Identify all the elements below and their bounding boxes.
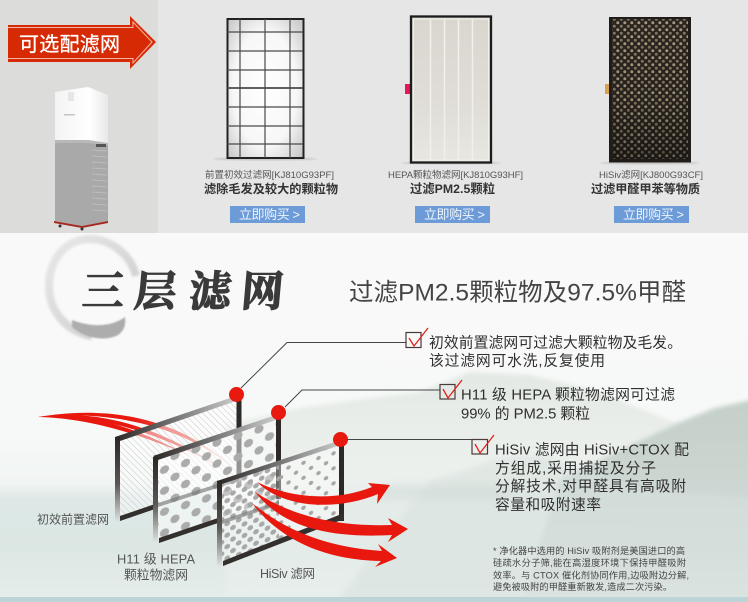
arrow: outgoing airflow middle	[255, 492, 408, 542]
text: HEPA caption: HEPA颗粒物滤网[KJ810G93HF]	[388, 169, 523, 181]
panel: HiSiv layer	[217, 439, 344, 566]
text: footnote: 避免被吸附的甲醛重新散发,造成二次污染。	[493, 581, 672, 592]
button: buy HiSiv filter: 立即购买 >	[623, 207, 684, 222]
text: pre-filter feature: 滤除毛发及较大的颗粒物	[204, 181, 338, 196]
text: pre-filter caption: 前置初效过滤网[KJ810G93PF]	[205, 169, 334, 181]
text: footnote: 效率。与 CTOX 催化剂协同作用,边吸附边分解,	[493, 570, 689, 580]
icon: marker dot HEPA	[271, 405, 286, 420]
text: footnote: * 净化器中选用的 HiSiv 吸附剂是美国进口的高	[493, 545, 685, 556]
text: footnote: 硅疏水分子筛,能在高湿度环境下保持甲醛吸附	[493, 557, 686, 568]
text: pre-filter description: 该过滤网可水洗,反复使用	[429, 352, 605, 370]
text: HEPA description: H11 级 HEPA 颗粒物滤网可过滤	[461, 386, 675, 404]
icon: marker dot HiSiv	[333, 432, 348, 447]
heading: filtration subtitle: 过滤PM2.5颗粒物及97.5%甲醛	[349, 278, 686, 306]
text: HiSiv description: 容量和吸附速率	[495, 496, 601, 514]
arrow: incoming airflow	[38, 413, 236, 471]
leader line: pre-filter	[241, 342, 406, 388]
icon: ink circle	[49, 239, 136, 338]
text: HiSiv description: 分解技术,对甲醛具有高吸附	[495, 478, 686, 495]
icon: HiSiv filter	[600, 17, 700, 164]
text: HiSiv description	[495, 442, 689, 514]
heading: three-layer filter calligraphy	[80, 259, 286, 319]
text: pre-filter description: 初效前置滤网可过滤大颗粒物及毛发。	[429, 334, 682, 352]
panel: top filter strip background	[158, 0, 748, 233]
leader line: HiSiv	[347, 438, 472, 440]
text: HiSiv description: HiSiv 滤网由 HiSiv+CTOX 配	[495, 442, 689, 458]
text: HiSiv feature: 过滤甲醛甲苯等物质	[591, 181, 700, 196]
icon: air purifier	[54, 87, 108, 230]
arrow: outgoing airflow bottom	[252, 503, 397, 567]
label: HEPA filter: H11 级 HEPA	[117, 552, 195, 566]
text: pre-filter description	[429, 334, 682, 370]
arrow: outgoing airflow top	[257, 482, 390, 505]
text: HiSiv caption: HiSiv滤网[KJ800G93CF]	[599, 169, 703, 181]
icon: marker dot pre-filter	[229, 387, 244, 402]
heading: three-layer filter calligraphy: 网	[239, 259, 286, 319]
icon: HEPA filter	[401, 16, 501, 164]
diagram: three filter layers	[38, 387, 408, 567]
heading: three-layer filter calligraphy: 层	[132, 259, 181, 319]
text: footnote	[493, 545, 689, 592]
label: HiSiv filter: HiSiv 滤网	[260, 567, 315, 581]
text: HiSiv description: 方组成,采用捕捉及分子	[495, 460, 656, 477]
icon: checkbox two	[440, 380, 462, 399]
button: buy HEPA filter: 立即购买 >	[424, 207, 485, 222]
panel: ink-wash landscape background	[0, 233, 748, 602]
panel: pre-filter layer	[115, 395, 242, 522]
button: buy pre-filter: 立即购买 >	[239, 207, 300, 222]
panel: purifier side background	[0, 0, 158, 233]
text: HEPA description: 99% 的 PM2.5 颗粒	[461, 406, 590, 422]
arrow: optional filters banner	[8, 16, 156, 69]
text: HEPA description	[461, 386, 675, 422]
heading: banner text: 可选配滤网	[19, 33, 120, 56]
leader line: HEPA	[285, 390, 440, 407]
label: pre-filter: 初效前置滤网	[37, 512, 109, 526]
icon: pre-filter frame	[213, 19, 317, 160]
label: HEPA filter	[117, 552, 195, 582]
text: HEPA feature: 过滤PM2.5颗粒	[410, 181, 495, 196]
panel: HEPA layer	[153, 414, 281, 543]
label: HEPA filter: 颗粒物滤网	[124, 568, 188, 582]
heading: three-layer filter calligraphy: 三	[80, 259, 127, 319]
icon: checkbox one	[406, 328, 428, 348]
heading: three-layer filter calligraphy: 滤	[187, 259, 237, 319]
icon: checkbox three	[472, 435, 494, 454]
